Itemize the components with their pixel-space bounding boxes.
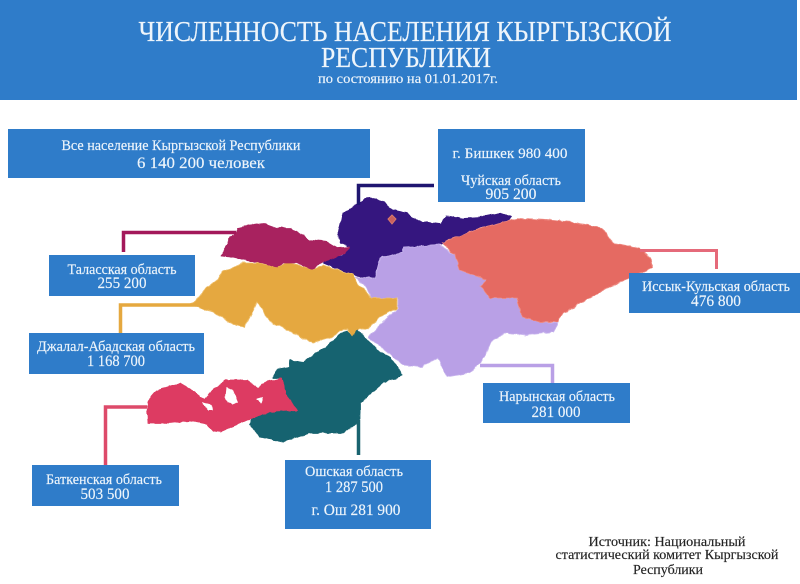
panel: Batken: 503 500 [80,486,130,503]
connector: Batken [106,407,147,465]
source note: статистический комитет Кыргызской [556,548,779,563]
region: Jalal-Abad [190,262,397,343]
title: РЕСПУБЛИКИ [321,42,491,74]
map of regions [147,198,652,442]
panel: Batken: Баткенская область [46,472,162,488]
connector: Osh [357,420,360,455]
source note: Источник: Национальный [588,535,746,550]
title: ЧИСЛЕННОСТЬ НАСЕЛЕНИЯ КЫРГЫЗСКОЙ [138,16,672,48]
connector: Naryn [480,366,552,383]
panel: total population [8,129,370,178]
panel: Talas [49,255,195,296]
connector: Issyk-Kul [640,250,716,269]
panel: Jalal-Abad [29,333,204,374]
connector: Jalal-Abad [120,305,200,333]
panel: Batken [32,465,179,506]
panel: Naryn [483,383,630,423]
panel: total population: 6 140 200 человек [137,155,265,172]
panel: Osh: 1 287 500 [325,479,383,496]
panel: Bishkek and Chui: 905 200 [486,186,537,203]
panel: Bishkek and Chui: Чуйская область [461,173,561,189]
panel: Naryn: Нарынская область [499,389,615,405]
panel: Talas: Таласская область [68,262,177,278]
panel: Osh: г. Ош 281 900 [312,502,401,519]
source note: Республики [633,563,704,578]
panel: Bishkek and Chui: г. Бишкек 980 400 [452,146,568,162]
panel: Issyk-Kul: Иссык-Кульская область [642,279,790,295]
region: Chui [323,198,512,278]
panel: Jalal-Abad: Джалал-Абадская область [37,339,195,355]
panel: Jalal-Abad: 1 168 700 [87,353,145,370]
header banner [0,0,797,100]
panel: Osh [285,460,431,529]
panel: total population: Все население Кыргызской Республики [62,138,301,154]
title [138,16,672,74]
region: Talas [221,223,350,269]
region: Issyk-Kul [442,218,652,322]
region: Osh [250,330,403,442]
region: Batken [147,378,297,432]
panel: Talas: 255 200 [98,275,147,292]
panel: Issyk-Kul: 476 800 [691,293,741,310]
panel: Bishkek and Chui [438,129,585,203]
panel: Issyk-Kul [629,273,800,313]
region: Naryn [355,245,558,377]
subtitle: date: по состоянию на 01.01.2017г. [318,72,498,87]
connector: Talas [124,232,236,252]
source note [556,535,779,578]
connector: Chui [358,186,434,205]
marker: Bishkek [388,215,396,224]
panel: Osh: Ошская область [305,464,403,480]
panel: Naryn: 281 000 [532,404,581,421]
